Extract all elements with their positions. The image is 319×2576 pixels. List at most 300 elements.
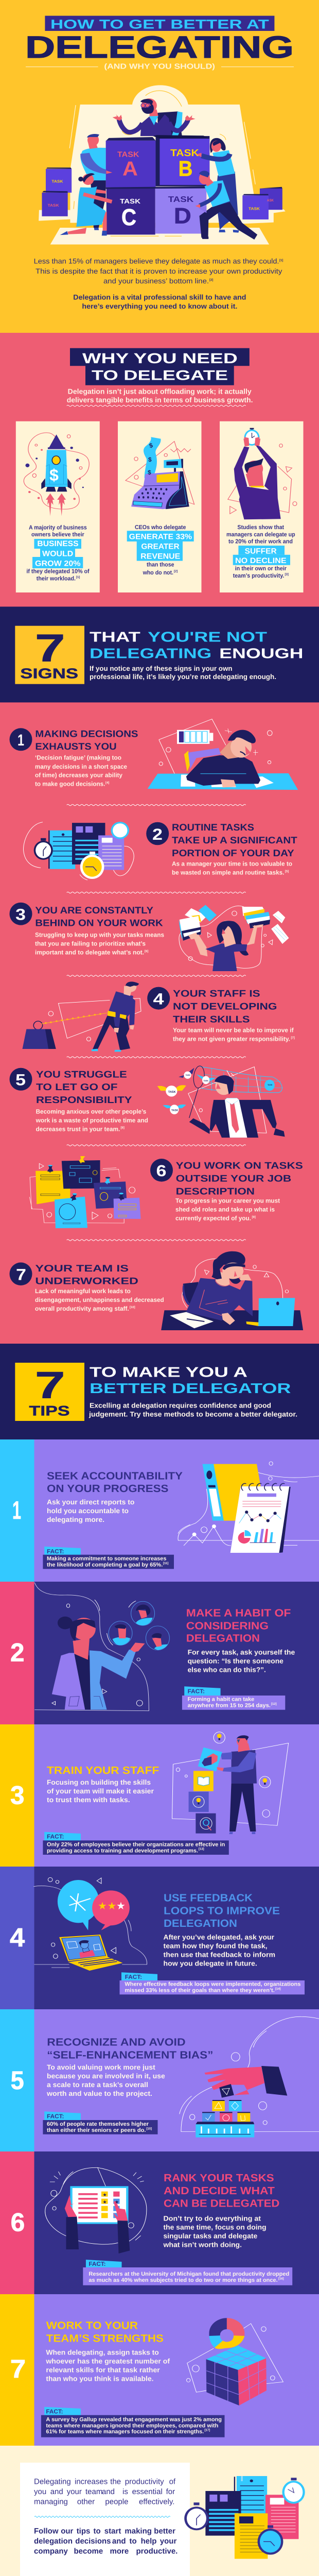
sign 4 heading: THEIR SKILLS (173, 1014, 250, 1025)
why delegate intro text: Delegation isn’t just about offloading work; it actually (68, 387, 252, 396)
hero illustration: team and task boxes: TASK (117, 151, 139, 159)
sign 7 text: [10] (130, 1306, 135, 1309)
stat text: to 20% of their work and (228, 538, 293, 545)
sign 3 heading (35, 905, 163, 928)
sign 3 heading: YOU ARE CONSTANTLY (35, 905, 154, 916)
intro text: Delegation is a vital professional skill to have and (73, 293, 246, 301)
tip 2 heading: CONSIDERING (186, 1620, 269, 1632)
panel: tip 6 rank tasks (0, 2151, 319, 2294)
sign 3 heading: BEHIND ON YOUR WORK (35, 917, 163, 928)
fact box: A survey by Gallup revealed that engagement was just 2% among (46, 2416, 222, 2422)
tip 4 text: then use that feedback to inform (164, 1951, 275, 1959)
illustration: bored woman at laptop (161, 1251, 303, 1330)
conclusion call to action: company (34, 2547, 68, 2555)
tip 1 text: Ask your direct reports to (47, 1498, 134, 1506)
number badge 6 (150, 1159, 173, 1182)
tip 2 text (188, 1649, 295, 1674)
sign 1 text: many decisions in a short space (35, 763, 127, 770)
sign 6 heading (176, 1160, 303, 1196)
tip 6 text: the same time, focus on doing (164, 2224, 267, 2231)
sign 5: let go of responsibility: TASK (168, 1091, 176, 1094)
sign 5 text: Becoming anxious over other people’s (36, 1108, 147, 1115)
tip 5 text: To avoid valuing work more just (47, 2063, 155, 2071)
sign 2 heading: PORTION OF YOUR DAY (172, 848, 294, 858)
panel: tip 1 accountability (0, 1439, 319, 1582)
hero illustration: team and task boxes: TASK (48, 203, 59, 208)
number badge 5: 5 (15, 1071, 26, 1089)
number 6: 6 (11, 2208, 25, 2237)
sign 6 heading: YOU WORK ON TASKS (176, 1160, 303, 1171)
title line one: HOW TO GET BETTER AT (50, 18, 269, 32)
panel: conclusion (0, 2446, 319, 2576)
tip 7 heading: TEAM’S STRENGTHS (46, 2333, 164, 2345)
hero illustration: team and task boxes: D (174, 204, 191, 229)
sign 6 text: [9] (252, 1215, 256, 1219)
signs heading text: DELEGATING (90, 645, 211, 662)
tip 6 heading: CAN BE DELEGATED (164, 2197, 279, 2209)
conclusion text: managing (34, 2497, 68, 2506)
intro text: This is despite the fact that it is proven to increase your own productivity (36, 267, 282, 275)
fact box: Where effective feedback loops were implemented, organizations (125, 1981, 300, 1988)
intro text: and your business’ bottom line. (103, 277, 209, 285)
sign 1 heading: EXHAUSTS YOU (35, 741, 117, 752)
fact box: [14] (275, 1987, 281, 1991)
signs heading text: YOU'RE NOT (148, 629, 267, 645)
sign 2 heading: TAKE UP A SIGNIFICANT (172, 835, 297, 845)
sign 5 text: [8] (120, 1126, 125, 1129)
stat text: A majority of business (29, 525, 87, 531)
conclusion call to action: and (112, 2537, 126, 2546)
tip 2 heading: MAKE A HABIT OF (186, 1607, 291, 1619)
tip 1 text (47, 1498, 134, 1523)
heading: why you need to delegate: TO DELEGATE (92, 368, 228, 383)
number badge 3 (9, 903, 32, 925)
tip 3 heading: TRAIN YOUR STAFF (47, 1765, 159, 1776)
tip 5 text: worth and value to the project. (46, 2090, 152, 2097)
title main word: DELEGATING (25, 30, 294, 64)
illustration: trainer with skill cards (172, 1732, 289, 1834)
sign 7 heading (35, 1263, 138, 1286)
sign 1 heading (35, 728, 138, 752)
tip 2 heading: DELEGATION (186, 1633, 260, 1645)
tip 6 text (163, 2215, 267, 2249)
intro text (34, 258, 283, 310)
tip 5 heading (47, 2037, 213, 2061)
tip 3 text: to trust them with tasks. (47, 1796, 130, 1804)
sign 2 text (172, 860, 292, 876)
sign 2: routine tasks (23, 822, 297, 880)
conclusion text: your (67, 2487, 82, 2496)
title (25, 16, 294, 71)
number 4: 4 (10, 1923, 25, 1952)
sign 1 heading: MAKING DECISIONS (35, 728, 138, 739)
hero illustration: team and task boxes: TASK (120, 197, 141, 205)
title banner (45, 16, 274, 31)
tip 2 heading (186, 1607, 291, 1645)
panel: tip 6 rank tasks: ★ (103, 2193, 107, 2198)
stat text: [3] (285, 573, 289, 576)
conclusion call to action: your (160, 2537, 176, 2546)
tip 7 text (45, 2349, 170, 2383)
fact box: [16] (278, 2277, 284, 2280)
illustration: woman juggling paperwork (179, 905, 289, 971)
sign 4 heading (173, 988, 277, 1025)
tip 4 heading (164, 1892, 280, 1929)
tip 3 text: of your team will make it easier (47, 1787, 154, 1795)
conclusion call to action: tips (77, 2527, 90, 2536)
tip 2 text: For every task, ask yourself the (188, 1649, 295, 1656)
sign 4 text (173, 1027, 295, 1043)
fact box: Making a commitment to someone increases (47, 1556, 166, 1562)
tip 1 text: hold you accountable to (47, 1507, 129, 1515)
conclusion text (34, 2478, 176, 2506)
signs heading text: THAT (90, 629, 140, 645)
hero illustration: team and task boxes: A (122, 158, 138, 180)
illustration: hand stacking blocks (180, 2016, 319, 2138)
sign 5 text: decreases trust in your team. (36, 1125, 120, 1132)
tip 3 text: Focusing on building the skills (47, 1778, 151, 1786)
panel: card business growth: $ (49, 466, 59, 484)
tip 6 text: singular tasks and delegate (164, 2232, 258, 2240)
stat text: WOULD (42, 549, 73, 558)
sign 3 text: important and to delegate what’s not. (35, 949, 144, 956)
panel: card greater revenue: $ (148, 456, 152, 463)
stat text (26, 525, 90, 582)
number badge 1: 1 (17, 731, 24, 749)
illustration: donut chart and cube (187, 2318, 283, 2405)
conclusion call to action: our (61, 2527, 74, 2536)
stat text: who do not. (143, 570, 173, 576)
icon: cash register (126, 437, 194, 509)
icon: man holding stopwatch (228, 428, 297, 519)
tip 6 heading (164, 2172, 279, 2209)
conclusion text: for (166, 2487, 175, 2496)
hero illustration: team and task boxes: TASK (51, 179, 63, 183)
fact box (182, 1686, 285, 1710)
panel: tip 6 rank tasks: ★ (103, 2200, 107, 2205)
sign 1 text: ‘Decision fatigue’ (making too (35, 754, 121, 761)
fact box: Only 22% of employees believe their organizations are effective in (47, 1841, 225, 1848)
number 7: 7 (10, 2354, 26, 2383)
tip 1 text: delegating more. (47, 1516, 104, 1523)
stat text: team’s productivity. (233, 573, 284, 579)
number 5: 5 (11, 2066, 24, 2095)
fact box: FACT: (88, 2261, 106, 2267)
tip 7 text: whoever has the greatest number of (45, 2358, 170, 2365)
tip 4 text: how you delegate in future. (164, 1960, 257, 1968)
fact box: FACT: (47, 1834, 64, 1840)
fact box: teams where managers ignored their employees, compared with (46, 2422, 218, 2429)
sign 1 text: to make good decisions. (35, 781, 105, 788)
subtitle: (AND WHY YOU SHOULD) (104, 63, 215, 71)
conclusion text: other (77, 2497, 95, 2506)
number badge 5 (9, 1068, 32, 1091)
fact box: Forming a habit can take (188, 1697, 254, 1703)
sign 4: staff not developing (22, 981, 295, 1052)
fact box: FACT: (188, 1689, 205, 1695)
sign 6 text: currently expected of you. (175, 1215, 251, 1222)
tip 5 text: a scale to rate a task’s overall (47, 2081, 148, 2089)
panel: card greater revenue (118, 421, 202, 592)
stat text: SUFFER (245, 547, 277, 555)
conclusion call to action: help (141, 2537, 156, 2546)
sign 4 heading: NOT DEVELOPING (173, 1001, 277, 1012)
signs heading text: ENOUGH (219, 645, 304, 662)
fact box: [17] (205, 2429, 210, 2432)
sign 1: decisions (9, 719, 298, 790)
conclusion call to action: better (154, 2527, 175, 2536)
section: 7 signs background (0, 702, 319, 1344)
conclusion call to action: Follow (34, 2527, 59, 2536)
panel: tip 4 feedback loops: ★ (98, 1900, 107, 1912)
tip 1 heading: SEEK ACCOUNTABILITY (47, 1470, 183, 1482)
conclusion text: productivity (125, 2478, 164, 2486)
sign 5 text (36, 1108, 148, 1132)
badge: 7 signs: 7 (35, 626, 65, 670)
sign 7 text: Lack of meaningful work leads to (35, 1287, 131, 1295)
section: intro background (0, 0, 319, 333)
sign 4 text: [7] (291, 1036, 295, 1040)
conclusion text: essential (132, 2487, 163, 2496)
sign 4 text: Your team will never be able to improve if (173, 1027, 294, 1034)
number 1: 1 (12, 1497, 21, 1524)
number 3: 3 (10, 1781, 25, 1810)
sign 3 text: Struggling to keep up with your tasks means (35, 931, 164, 939)
panel: card suffer no decline (220, 421, 304, 592)
stat text (226, 524, 295, 579)
tip 7 heading (46, 2320, 164, 2345)
sign 7: team underworked (9, 1251, 303, 1330)
fact box (43, 2111, 158, 2134)
tip 4 heading: DELEGATION (164, 1918, 237, 1929)
sign 5 heading: RESPONSIBILITY (36, 1094, 132, 1105)
sign 2 text: As a manager your time is too valuable to (172, 860, 292, 868)
signs intro text: If you notice any of these signs in your own (90, 665, 233, 672)
number badge 4 (147, 987, 170, 1010)
fact box (83, 2260, 292, 2285)
intro text: Less than 15% of managers believe they delegate as much as they could. (34, 258, 279, 265)
tip 4 heading: USE FEEDBACK (164, 1892, 253, 1904)
panel: tip 4 feedback loops: ★ (116, 1900, 126, 1912)
stat text: [2] (174, 570, 178, 573)
stat text: NO DECLINE (235, 556, 287, 565)
fact box: [13] (199, 1848, 204, 1851)
tip 6 heading: AND DECIDE WHAT (164, 2185, 275, 2197)
intro text: [1] (279, 259, 283, 262)
conclusion text: increases (75, 2478, 108, 2486)
tip 5 text: because you are involved in it, use (47, 2072, 165, 2080)
sign 2 text: be wasted on simple and routine tasks. (172, 869, 284, 876)
stat text: BUSINESS (37, 539, 79, 548)
fact box: 61% for teams where managers focused on their strengths. (46, 2429, 204, 2435)
number badge 6: 6 (156, 1162, 167, 1180)
fact box: than either their seniors or peers do. (47, 2127, 146, 2133)
sign 3 text: [6] (145, 950, 148, 953)
fact box: FACT: (46, 2409, 63, 2415)
why delegate intro text: delivers tangible benefits in terms of business growth. (67, 396, 253, 404)
illustration: exhausted man at desk (148, 719, 298, 790)
illustration: documents and clocks (184, 2476, 305, 2559)
fact box (43, 1832, 229, 1855)
panel: tip 5 self-enhancement bias (0, 2009, 319, 2151)
sign 6 heading: OUTSIDE YOUR JOB (176, 1173, 291, 1184)
fact box: FACT: (125, 1974, 142, 1980)
fact box: Researchers at the University of Michigan found that productivity dropped (88, 2271, 289, 2277)
tip 7 text: When delegating, assign tasks to (46, 2349, 159, 2357)
conclusion call to action: to (130, 2537, 137, 2546)
heading: why you need to delegate (70, 348, 250, 385)
sign 5: let go of responsibility: TASK (204, 1080, 208, 1082)
signs heading text (90, 629, 304, 662)
sign 5: let go of responsibility: TASK (268, 1084, 273, 1086)
badge: 7 tips: TIPS (29, 1403, 70, 1418)
tip 2 text: question: “Is there someone (188, 1657, 283, 1665)
conclusion text: the (110, 2478, 121, 2486)
tip 1 heading (47, 1470, 183, 1495)
sign 5 text: work is a waste of productive time and (36, 1116, 148, 1124)
number badge 4: 4 (153, 990, 164, 1008)
sign 7 text (35, 1287, 164, 1312)
number 2: 2 (10, 1638, 25, 1667)
section: why you need to delegate background (0, 333, 319, 607)
conclusion text: of (169, 2478, 176, 2486)
sign 5 heading (36, 1069, 132, 1105)
sign 5: let go of responsibility: TASK (185, 1074, 190, 1076)
stat text: managers can delegate up (226, 532, 295, 538)
fact box (119, 1972, 305, 1994)
illustration: documents and clocks (23, 822, 134, 880)
sign 2 heading (172, 822, 297, 858)
sign 5: let go of responsibility (9, 1065, 285, 1138)
tips heading text: BETTER DELEGATOR (90, 1380, 291, 1396)
panel: tip 4 feedback loops (0, 1867, 319, 2009)
sign 6 text (175, 1197, 280, 1222)
sign 6 text: shed old roles and take up what is (175, 1206, 275, 1213)
fact box: anywhere from 15 to 254 days. (188, 1703, 271, 1709)
fact box: providing access to training and development programs. (47, 1848, 198, 1854)
sign 6 text: To progress in your career you must (175, 1197, 280, 1205)
hero illustration: team and task boxes: C (121, 204, 136, 230)
heading: 7 tips (15, 1363, 297, 1421)
heading: why you need to delegate: WHY YOU NEED (82, 350, 238, 366)
stat text: than those (147, 562, 174, 568)
fact box: the likelihood of completing a goal by 65%. (47, 1562, 163, 1568)
heading: 7 signs (15, 626, 304, 684)
number badge 1 (9, 728, 32, 751)
tip 6 heading: RANK YOUR TASKS (164, 2172, 274, 2184)
sign 7 text: overall productivity among staff. (35, 1305, 129, 1312)
sign 5 heading: TO LET GO OF (36, 1081, 117, 1092)
hero illustration: team and task boxes: ASK (267, 199, 274, 202)
tips intro text: Excelling at delegation requires confidence and good (90, 1402, 271, 1410)
fact box (43, 1547, 174, 1569)
conclusion text: Delegating (34, 2478, 71, 2486)
panel: card greater revenue: $ (148, 469, 151, 476)
panel: tip 3 train staff (0, 1724, 319, 1867)
sign 3 text: that you are failing to prioritize what’s (35, 940, 146, 947)
tips heading text: TO MAKE YOU A (90, 1364, 247, 1380)
conclusion call to action: to (94, 2527, 101, 2536)
tip 4 text: After you’ve delegated, ask your (164, 1934, 275, 1941)
stat text: [1] (76, 575, 80, 579)
stat text: REVENUE (140, 552, 180, 561)
tip 4 heading: LOOPS TO IMPROVE (164, 1905, 280, 1917)
tip 7 text: relevant skills for that task rather (46, 2366, 161, 2374)
sign 2 text: [5] (285, 870, 289, 873)
conclusion call to action: start (104, 2527, 121, 2536)
number badge 2 (146, 822, 169, 845)
conclusion text: team (85, 2487, 102, 2496)
fact box: [11] (163, 1562, 168, 1565)
stat text: if they delegated 10% of (26, 569, 90, 575)
fact box: missed 33% less of their goals than where they weren’t. (125, 1988, 275, 1994)
icon: rocket (24, 433, 89, 516)
hero illustration: team and task boxes: TASK (168, 195, 194, 204)
conclusion text: people (105, 2497, 128, 2506)
illustration: ranked task tablet (45, 2167, 147, 2253)
tip 2 text: else who can do this?”. (188, 1666, 266, 1674)
sign 1 text: [4] (105, 781, 109, 785)
sign 7 heading: YOUR TEAM IS (35, 1263, 129, 1274)
illustration: binder and notebook chart (178, 1462, 319, 1553)
tips intro text (88, 1402, 297, 1418)
fact box: FACT: (47, 1549, 64, 1555)
tip 3 text (47, 1778, 154, 1804)
conclusion text: you (34, 2487, 46, 2496)
number badge 7 (9, 1262, 32, 1285)
fact box: as much as 40% when subjects tried to do two or more things at once. (88, 2277, 278, 2283)
panel: tip 7 team strengths (0, 2294, 319, 2446)
stat text (127, 524, 194, 576)
sign 6: tasks outside job (29, 1156, 303, 1228)
tip 6 text: what isn’t worth doing. (163, 2241, 242, 2249)
conclusion call to action (34, 2527, 178, 2555)
illustration: pinned sticky notes (29, 1156, 141, 1228)
sign 5 heading: YOU STRUGGLE (36, 1069, 127, 1079)
section: 7 tips header background (0, 1344, 319, 1439)
stat text: in their own or their (235, 566, 287, 572)
sign 4 text: they are not given greater responsibility. (173, 1036, 290, 1043)
intro text: [2] (209, 278, 213, 282)
sign 7 text: disengagement, unhappiness and decreased (35, 1296, 164, 1303)
panel: card greater revenue: $ (148, 442, 154, 449)
conclusion text: is (122, 2487, 128, 2496)
sign 6 heading: DESCRIPTION (176, 1185, 255, 1196)
panel: card business growth (16, 421, 100, 592)
illustration: man chasing flying tasks with net (157, 1065, 285, 1138)
conclusion call to action: making (125, 2527, 152, 2536)
conclusion call to action: delegation (34, 2537, 73, 2546)
signs intro text: professional life, it’s likely you’re not delegating enough. (90, 673, 276, 681)
stat text: GREATER (141, 543, 180, 551)
conclusion text: and (102, 2487, 115, 2496)
conclusion call to action: become (74, 2547, 103, 2555)
tip 5 heading: RECOGNIZE AND AVOID (47, 2037, 186, 2048)
tip 7 heading: WORK TO YOUR (46, 2320, 138, 2332)
fact box: [15] (146, 2127, 152, 2131)
fact box: [12] (271, 1702, 277, 1706)
tip 4 text: team how they found the task, (164, 1942, 268, 1950)
hero illustration: team and task boxes: TASK (249, 207, 260, 211)
stat text: GROW 20% (35, 560, 81, 568)
tip 5 text (46, 2063, 165, 2097)
tip 5 heading: “SELF-ENHANCEMENT BIAS” (47, 2049, 213, 2061)
sign 4 heading: YOUR STAFF IS (173, 988, 260, 999)
sign 3 text (35, 931, 164, 956)
tips intro text: judgement. Try these methods to become a better delegator. (88, 1410, 297, 1418)
conclusion call to action: more (110, 2547, 129, 2555)
hero illustration: team and task boxes: TASK (170, 148, 199, 159)
